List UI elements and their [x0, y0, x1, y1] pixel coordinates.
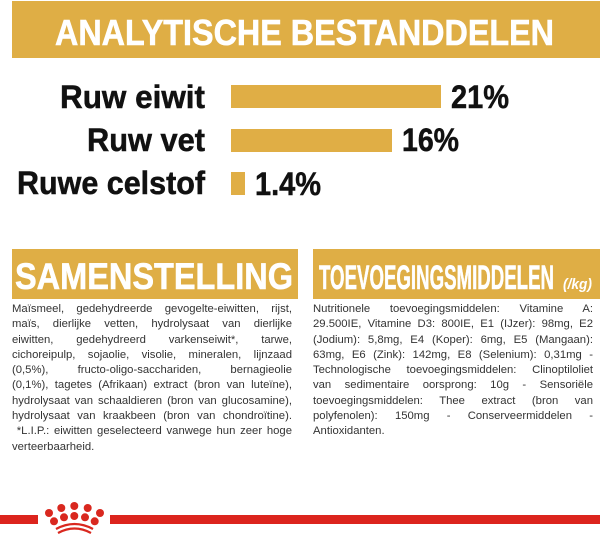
text block: toevoegingsmiddelen: van sedimentaire oorsprong: 10g - Sensoriële	[313, 379, 593, 391]
text block: samenstelling	[12, 303, 292, 453]
footer line right	[110, 515, 600, 524]
text block: toevoegingsmiddelen: Antioxidanten.	[313, 425, 385, 437]
text block: toevoegingsmiddelen	[313, 303, 593, 437]
text block: toevoegingsmiddelen: Technologische toevoegingsmiddelen: Clinoptiloliet	[313, 364, 593, 376]
text block: samenstelling: hydrolysaat van schaaldieren (bron van glucosamine),	[12, 395, 292, 407]
text block: samenstelling: cichoreipulp, sojaolie, visolie, mineralen, lijnzaad	[12, 349, 292, 361]
bar row: ruw vet 16%	[87, 122, 459, 158]
bar row: ruw vet 16%: Ruw vet	[87, 122, 205, 158]
text block: toevoegingsmiddelen: polyfenolen): 150mg - Conserveermiddelen -	[313, 410, 593, 422]
heading: analytische bestanddelen: ANALYTISCHE BESTANDDELEN	[55, 12, 554, 53]
bar row: ruw vet 16%: 16%	[402, 122, 459, 158]
bar row: ruwe celstof 1.4%: 1.4%	[255, 166, 321, 202]
heading: toevoegingsmiddelen: (/kg)	[563, 276, 592, 293]
text block: toevoegingsmiddelen: 63mg, E6 (Zink): 142mg, E8 (Selenium): 0,31mg -	[313, 349, 593, 361]
bar row: ruwe celstof 1.4%: Ruwe celstof	[17, 165, 205, 201]
text block: samenstelling: *L.I.P.: eiwitten geselecteerd vanwege hun zeer hoge	[17, 425, 292, 437]
heading: analytische bestanddelen	[12, 1, 600, 58]
text block: samenstelling: (0,1%), tagetes (Afrikaan) extract (bron van luteïne),	[12, 379, 292, 391]
bar row: ruwe celstof 1.4%	[17, 165, 321, 202]
bar row: ruw eiwit 21%: 21%	[451, 79, 509, 115]
icon: crown	[45, 502, 104, 533]
heading: samenstelling: SAMENSTELLING	[15, 256, 293, 297]
text block: samenstelling: verteerbaarheid.	[12, 441, 94, 453]
text block: toevoegingsmiddelen: toevoegingsmiddelen: Thee extract (bron van	[313, 395, 593, 407]
text block: samenstelling: Maïsmeel, gedehydreerde gevogelte-eiwitten, rijst,	[12, 303, 292, 315]
footer line left	[0, 515, 38, 524]
text block: samenstelling: (0,5%), fructo-oligo-sacchariden, bernagieolie	[12, 364, 292, 376]
bar row: ruw eiwit 21%: Ruw eiwit	[60, 79, 205, 115]
text block: toevoegingsmiddelen: 29.500IE, Vitamine D3: 800IE, E1 (IJzer): 98mg, E2	[313, 318, 593, 330]
text block: samenstelling: hydrolysaat van kraakbeen (bron van chondroïtine).	[12, 410, 292, 422]
footer: red line with crown logo	[0, 502, 600, 533]
text block: samenstelling: eiwitten, gedehydreerd varkenseiwit*, tarwe,	[12, 334, 292, 346]
text block: toevoegingsmiddelen: (Jodium): 5,8mg, E4 (Koper): 6mg, E5 (Mangaan):	[313, 334, 593, 346]
text block: toevoegingsmiddelen: Nutritionele toevoegingsmiddelen: Vitamine A:	[313, 303, 593, 315]
bar row: ruw eiwit 21%	[60, 79, 509, 115]
text block: samenstelling: maïs, dierlijke vetten, hydrolysaat van dierlijke	[12, 318, 292, 330]
